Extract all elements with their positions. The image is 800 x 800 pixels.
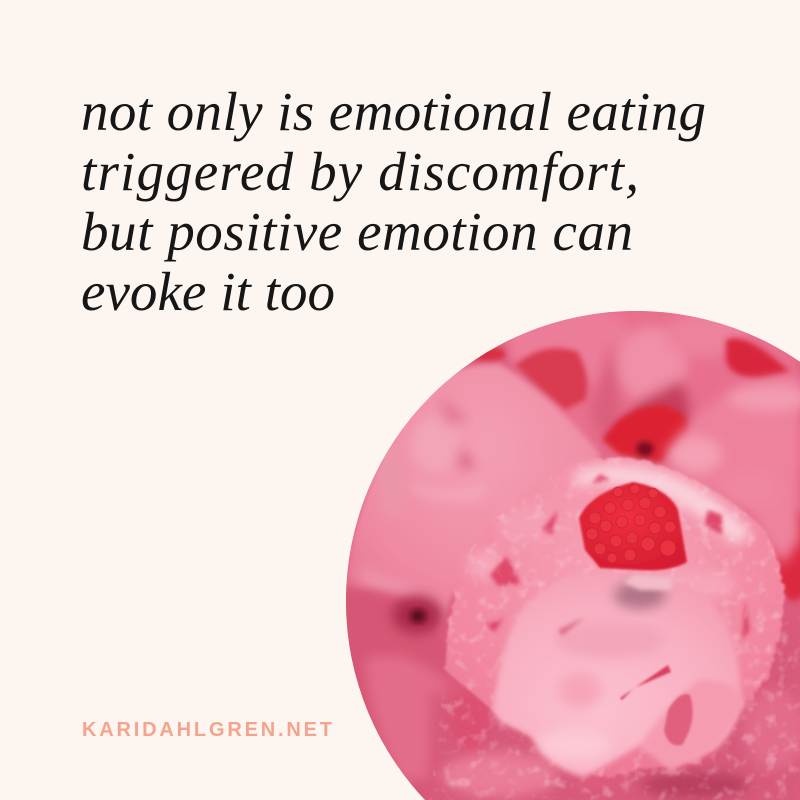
main scoop rough body <box>445 458 784 778</box>
back raspberries <box>470 338 800 601</box>
lower left scoop <box>340 585 450 800</box>
circular ice cream photo <box>340 300 800 800</box>
main scoop highlights and pits <box>467 465 752 640</box>
upper left scoop <box>345 364 602 640</box>
raspberry on top <box>579 482 687 609</box>
website credit: KARIDAHLGREN.NET <box>82 719 332 741</box>
right scoop <box>664 375 800 565</box>
heading: evoke it too <box>81 261 335 322</box>
heading: triggered by discomfort, <box>81 141 639 202</box>
heading <box>81 81 706 322</box>
bottom rubble <box>430 692 800 800</box>
main scoop smooth front <box>493 572 741 777</box>
heading: but positive emotion can <box>81 201 633 262</box>
infographic canvas <box>82 92 800 800</box>
heading: not only is emotional eating <box>81 81 706 142</box>
back scoops <box>502 311 800 467</box>
rough texture speckle <box>430 458 800 800</box>
smooth front details <box>539 617 693 761</box>
